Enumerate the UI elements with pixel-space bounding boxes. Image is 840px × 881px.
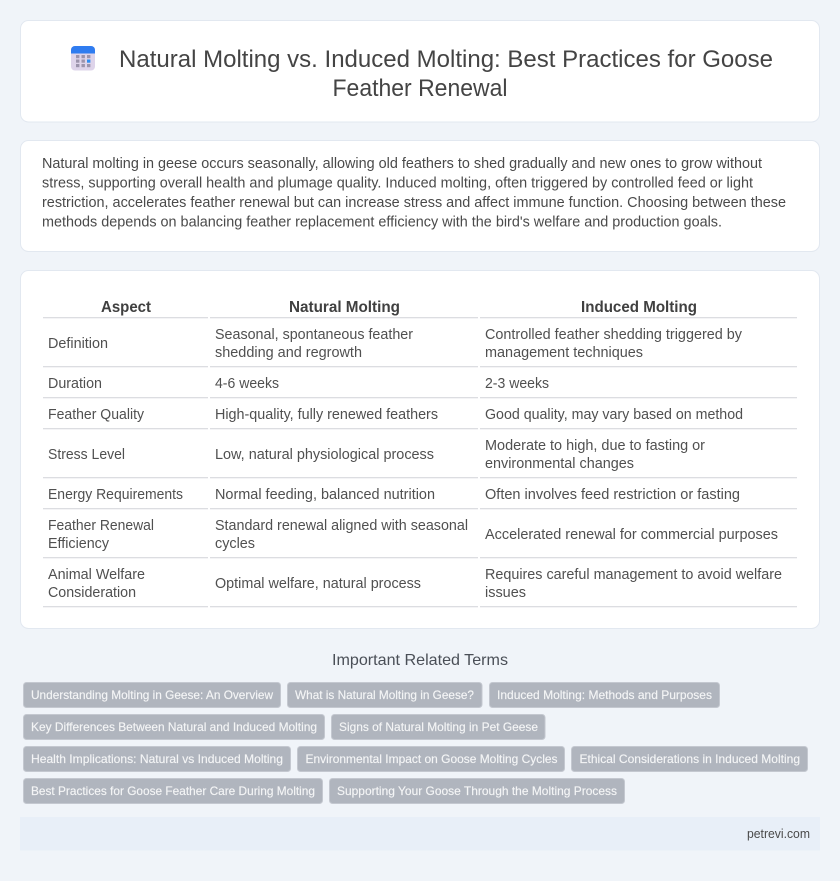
icon: calendar (71, 46, 95, 70)
tag: key differences (24, 714, 324, 740)
footer (20, 817, 820, 850)
row: duration: 4-6 weeks (215, 376, 279, 392)
table header row: Natural Molting (289, 299, 400, 316)
tag: best practices: Best Practices for Goose Feather Care During Molting (31, 784, 315, 798)
row: feather quality: Good quality, may vary based on method (485, 407, 743, 423)
row: duration (48, 376, 549, 392)
tag: induced molting (490, 682, 720, 708)
intro paragraph: Natural molting in geese occurs seasonally, allowing old feathers to shed gradually and new ones to grow without (42, 156, 762, 172)
row: feather renewal efficiency: Efficiency (48, 536, 110, 552)
tag: supporting your goose (330, 778, 624, 804)
row: definition: Seasonal, spontaneous feather (215, 327, 413, 343)
row: animal welfare consideration: Animal Welfare (48, 567, 145, 583)
footer: petrevi.com (747, 826, 810, 841)
row: definition (48, 327, 743, 361)
row: stress level: Low, natural physiological process (215, 447, 434, 463)
row: stress level: Stress Level (48, 447, 125, 463)
intro paragraph: stress, supporting overall health and plumage quality. Induced molting, often triggered by controlled feed or light (42, 176, 753, 192)
row: feather quality: High-quality, fully renewed feathers (215, 407, 438, 423)
row: animal welfare consideration: issues (485, 585, 526, 601)
title: Natural Molting vs. Induced Molting: Best Practices for Goose (119, 46, 773, 73)
row: energy requirements (48, 487, 740, 503)
tag: signs of natural molting (332, 714, 545, 740)
tag: induced molting: Induced Molting: Methods and Purposes (497, 688, 712, 702)
row: animal welfare consideration (48, 567, 782, 601)
row: feather renewal efficiency: Accelerated renewal for commercial purposes (485, 527, 778, 543)
row: stress level: environmental changes (485, 456, 634, 472)
row: feather renewal efficiency (48, 518, 778, 552)
tag: natural molting (288, 682, 482, 708)
table header row: Induced Molting (581, 299, 697, 316)
row: definition: shedding and regrowth (215, 345, 362, 361)
row: definition: management techniques (485, 345, 643, 361)
tag: environmental impact: Environmental Impact on Goose Molting Cycles (306, 752, 558, 766)
tag: natural molting: What is Natural Molting in Geese? (295, 688, 474, 702)
row: animal welfare consideration: Requires careful management to avoid welfare (485, 567, 782, 583)
panel: comparison table (20, 270, 820, 628)
row: stress level (48, 438, 705, 472)
intro paragraph (42, 156, 786, 230)
row: animal welfare consideration: Optimal welfare, natural process (215, 576, 421, 592)
row: definition: Controlled feather shedding triggered by (485, 327, 743, 343)
tag: ethical considerations (572, 746, 808, 772)
row: feather renewal efficiency: cycles (215, 536, 255, 552)
row: feather quality (48, 407, 743, 423)
panel: introduction (20, 140, 820, 252)
row: energy requirements: Normal feeding, balanced nutrition (215, 487, 435, 503)
row: feather renewal efficiency: Feather Renewal (48, 518, 154, 534)
tag: supporting your goose: Supporting Your Goose Through the Molting Process (337, 784, 617, 798)
table header row: Aspect (101, 299, 152, 316)
tag: key differences: Key Differences Between Natural and Induced Molting (31, 720, 317, 734)
intro paragraph: restriction, accelerates feather renewal but can increase stress and affect immune function. Choosing between these (42, 195, 786, 211)
row: stress level: Moderate to high, due to fasting or (485, 438, 705, 454)
row: duration: Duration (48, 376, 102, 392)
tag: signs of natural molting: Signs of Natural Molting in Pet Geese (339, 720, 538, 734)
row: definition: Definition (48, 336, 108, 352)
heading: related terms: Important Related Terms (332, 652, 508, 669)
tag: environmental impact (298, 746, 564, 772)
tag: understanding molting: Understanding Molting in Geese: An Overview (31, 688, 273, 702)
row: animal welfare consideration: Consideration (48, 585, 136, 601)
tag: understanding molting (24, 682, 280, 708)
row: feather quality: Feather Quality (48, 407, 145, 423)
related term tags (24, 682, 808, 804)
tag: ethical considerations: Ethical Considerations in Induced Molting (580, 752, 800, 766)
row: duration: 2-3 weeks (485, 376, 549, 392)
tag: health implications (24, 746, 290, 772)
panel: header (20, 20, 820, 122)
intro paragraph: methods depends on balancing feather replacement efficiency with the bird's welfare and production goals. (42, 214, 722, 230)
table header row (101, 299, 697, 316)
tag: best practices (24, 778, 322, 804)
title: Feather Renewal (332, 75, 508, 102)
tag: health implications: Health Implications: Natural vs Induced Molting (31, 752, 283, 766)
row: energy requirements: Often involves feed restriction or fasting (485, 487, 740, 503)
row: energy requirements: Energy Requirements (48, 487, 183, 503)
row: feather renewal efficiency: Standard renewal aligned with seasonal (215, 518, 468, 534)
title (119, 46, 773, 102)
